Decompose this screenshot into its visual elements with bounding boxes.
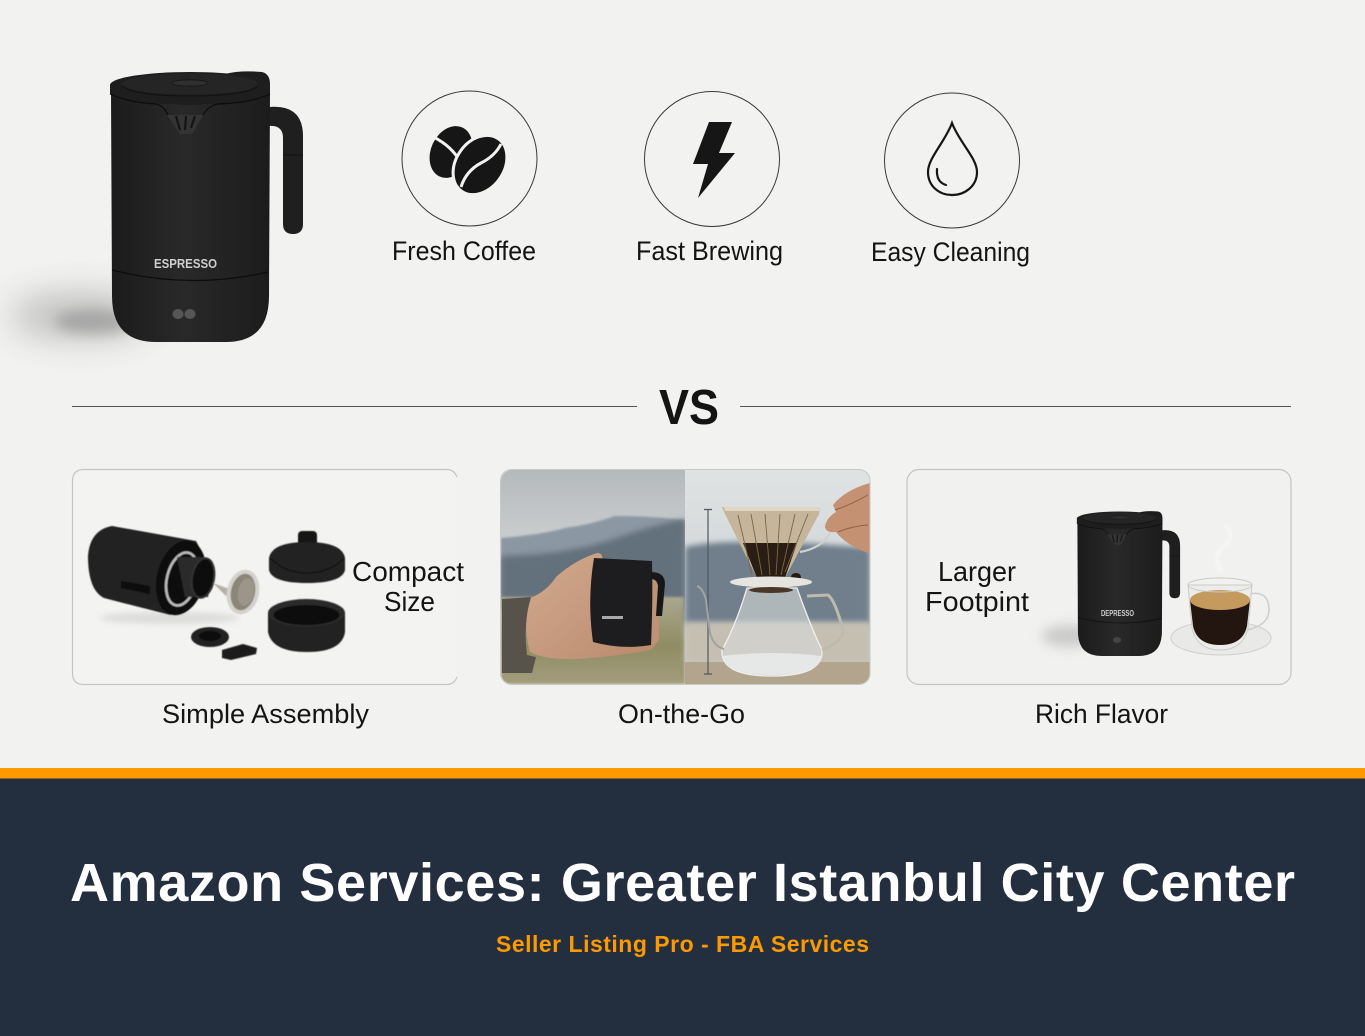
fingers behind mug bbox=[651, 579, 659, 643]
feature: fast brewing: Fast Brewing bbox=[636, 236, 783, 266]
feature: fresh coffee: Fresh Coffee bbox=[392, 236, 536, 266]
hand bbox=[825, 483, 870, 553]
product photo: espresso kettle: ESPRESSO bbox=[154, 257, 217, 271]
panel: on-the-go: On-the-Go bbox=[618, 699, 745, 729]
feature: fresh coffee bbox=[392, 91, 537, 266]
page background bbox=[0, 0, 1365, 768]
right photo: pour-over dripper and carafe bbox=[685, 470, 870, 684]
feature: fast brewing bbox=[636, 92, 783, 266]
photo pair bbox=[501, 470, 870, 684]
height measure line bbox=[704, 510, 712, 674]
palm and thumb bbox=[526, 553, 656, 659]
footer subtitle: Seller Listing Pro - FBA Services bbox=[496, 931, 869, 957]
dripper bbox=[722, 507, 830, 581]
panel: simple assembly: Compact bbox=[352, 556, 464, 587]
panel: simple assembly: Size bbox=[384, 586, 435, 617]
orange accent bar bbox=[0, 768, 1365, 778]
lower cup bbox=[268, 599, 345, 652]
panel: on-the-go bbox=[500, 470, 870, 729]
footer band bbox=[0, 778, 1365, 1036]
carafe bbox=[697, 576, 843, 676]
cap with knob bbox=[269, 531, 345, 583]
left photo: hand holding mini mug bbox=[501, 470, 685, 684]
espresso cup bbox=[1171, 525, 1271, 655]
panel: rich flavor: Footpint bbox=[925, 586, 1029, 617]
icon: coffee beans bbox=[402, 91, 537, 226]
icon: water drop bbox=[884, 93, 1020, 228]
exploded parts photo bbox=[88, 526, 345, 660]
panel: simple assembly bbox=[72, 470, 464, 729]
icon: lightning bolt bbox=[644, 92, 780, 226]
panel: rich flavor bbox=[907, 470, 1291, 729]
panel frame bbox=[907, 470, 1291, 684]
panel: simple assembly: Simple Assembly bbox=[162, 699, 369, 729]
panel: rich flavor: Rich Flavor bbox=[1035, 699, 1168, 729]
kettle photo: DEPRESSO bbox=[1101, 609, 1134, 618]
kettle photo bbox=[1042, 511, 1180, 656]
vs divider: VS bbox=[659, 381, 719, 435]
feature: easy cleaning bbox=[871, 93, 1030, 267]
feature: easy cleaning: Easy Cleaning bbox=[871, 237, 1030, 267]
footer title: Amazon Services: Greater Istanbul City Center bbox=[70, 853, 1295, 913]
panel frame bbox=[72, 470, 457, 684]
product photo: espresso kettle bbox=[10, 71, 303, 342]
panel: rich flavor: Larger bbox=[938, 556, 1016, 587]
sleeve bbox=[502, 597, 536, 673]
